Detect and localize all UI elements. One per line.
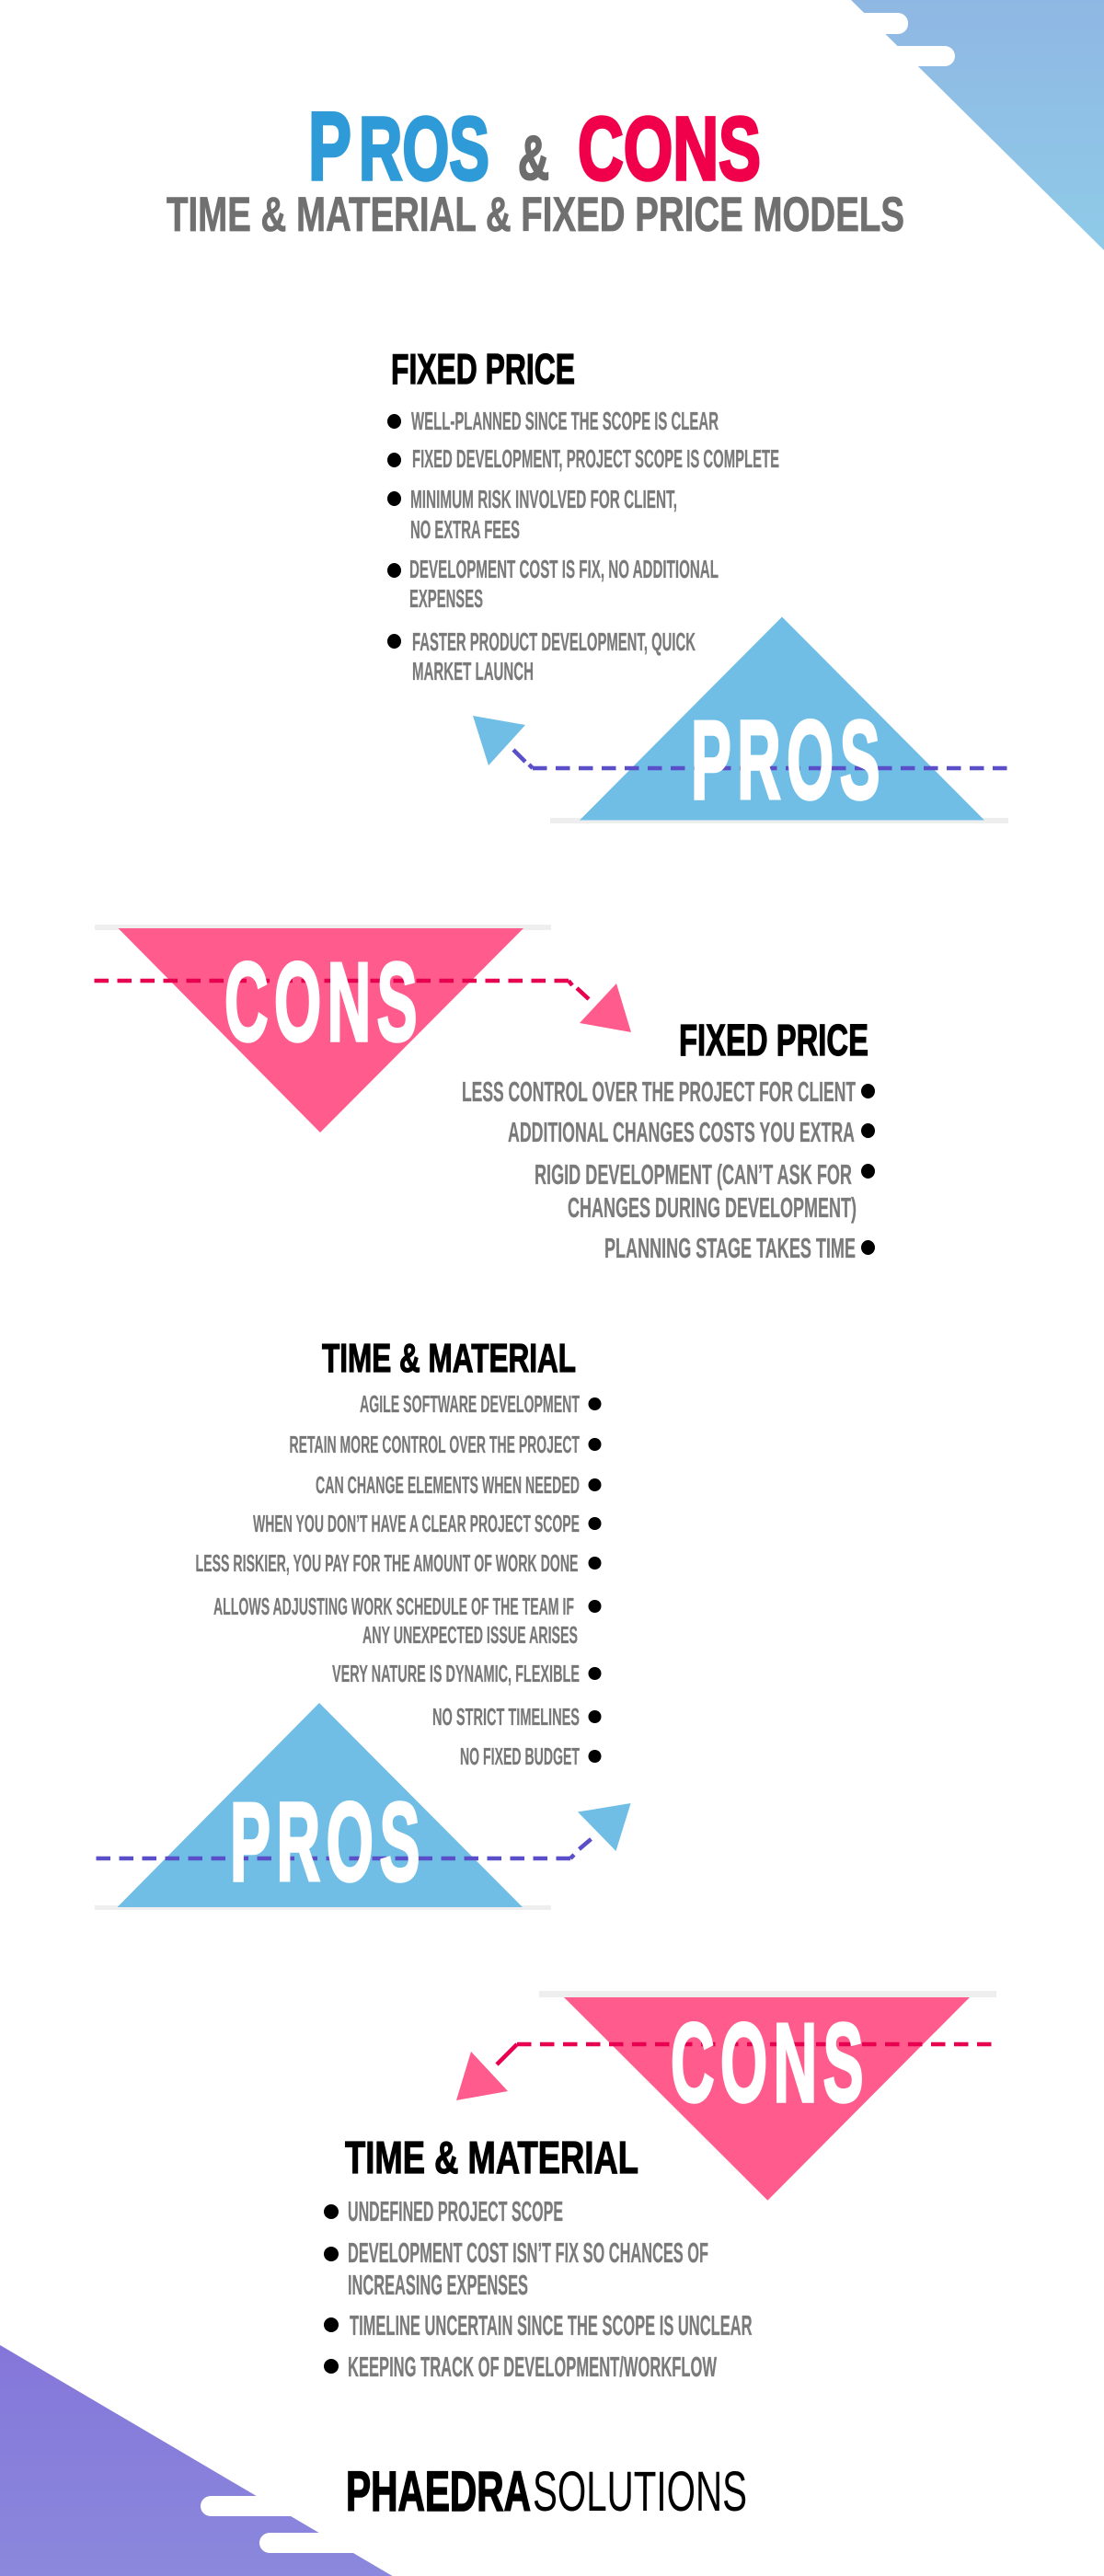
heading: time and material: TIME & MATERIAL bbox=[345, 2133, 638, 2183]
badge label: pros: PROS bbox=[691, 697, 886, 822]
list text: FIXED DEVELOPMENT, PROJECT SCOPE IS COMPLETE bbox=[412, 444, 779, 473]
heading: fixed price: FIXED PRICE bbox=[391, 345, 575, 393]
list text: WELL-PLANNED SINCE THE SCOPE IS CLEAR bbox=[411, 407, 719, 435]
list text bbox=[462, 1075, 857, 1264]
heading: time and material: TIME & MATERIAL bbox=[322, 1337, 576, 1381]
arrow head bbox=[578, 1803, 631, 1851]
list text: DEVELOPMENT COST ISN’T FIX SO CHANCES OF bbox=[348, 2237, 708, 2269]
bullets bbox=[324, 2204, 339, 2374]
list text: CHANGES DURING DEVELOPMENT) bbox=[568, 1191, 857, 1224]
badge: pros triangle with arrow (fixed price) bbox=[473, 616, 1008, 823]
panel: fixed price pros list bbox=[387, 345, 779, 685]
list text: LESS RISKIER, YOU PAY FOR THE AMOUNT OF WORK DONE bbox=[195, 1549, 578, 1577]
bullets bbox=[387, 414, 401, 649]
list text: TIMELINE UNCERTAIN SINCE THE SCOPE IS UNCLEAR bbox=[350, 2309, 753, 2341]
list text: MARKET LAUNCH bbox=[412, 657, 534, 685]
list text: NO STRICT TIMELINES bbox=[432, 1703, 580, 1731]
list text: CAN CHANGE ELEMENTS WHEN NEEDED bbox=[316, 1471, 580, 1499]
decorative corner: bottom left triangle bbox=[0, 2345, 392, 2576]
list text: ANY UNEXPECTED ISSUE ARISES bbox=[362, 1621, 578, 1649]
list text: AGILE SOFTWARE DEVELOPMENT bbox=[360, 1390, 580, 1418]
badge label: cons: CONS bbox=[224, 939, 423, 1064]
arrow head bbox=[456, 2052, 508, 2100]
arrow head bbox=[580, 983, 631, 1032]
heading: fixed price: FIXED PRICE bbox=[679, 1017, 868, 1065]
list text: ADDITIONAL CHANGES COSTS YOU EXTRA bbox=[508, 1116, 855, 1148]
list text: VERY NATURE IS DYNAMIC, FLEXIBLE bbox=[332, 1660, 580, 1687]
title word: cons: CONS bbox=[578, 98, 761, 199]
list text: INCREASING EXPENSES bbox=[348, 2269, 528, 2301]
list text bbox=[348, 2195, 753, 2383]
logo: phaedra solutions bbox=[346, 2460, 747, 2523]
list text: DEVELOPMENT COST IS FIX, NO ADDITIONAL bbox=[409, 555, 719, 583]
badge: cons triangle with arrow (time and material) bbox=[456, 1991, 996, 2201]
list text: EXPENSES bbox=[409, 584, 483, 613]
list text: UNDEFINED PROJECT SCOPE bbox=[348, 2195, 563, 2227]
list text: FASTER PRODUCT DEVELOPMENT, QUICK bbox=[412, 627, 696, 656]
list text: NO FIXED BUDGET bbox=[460, 1742, 580, 1770]
arrow head bbox=[473, 716, 525, 765]
logo: phaedra solutions: PHAEDRA bbox=[346, 2460, 531, 2523]
title ampersand: & bbox=[518, 123, 549, 193]
list text: RIGID DEVELOPMENT (CAN’T ASK FOR bbox=[535, 1158, 852, 1190]
badge label: cons: CONS bbox=[671, 2000, 869, 2125]
title word: pros bbox=[308, 93, 489, 201]
logo: phaedra solutions: SOLUTIONS bbox=[533, 2460, 747, 2523]
bullets bbox=[861, 1084, 875, 1255]
title word: pros: P bbox=[308, 93, 351, 201]
panel: fixed price cons list bbox=[462, 1017, 875, 1264]
list text: KEEPING TRACK OF DEVELOPMENT/WORKFLOW bbox=[348, 2351, 717, 2383]
bullets bbox=[589, 1397, 602, 1763]
badge label: pros: PROS bbox=[230, 1779, 426, 1904]
list text: ALLOWS ADJUSTING WORK SCHEDULE OF THE TEAM IF bbox=[213, 1593, 574, 1620]
list text: PLANNING STAGE TAKES TIME bbox=[604, 1232, 856, 1264]
panel: time and material cons list bbox=[324, 2133, 753, 2383]
title bbox=[167, 93, 904, 242]
list text: WHEN YOU DON’T HAVE A CLEAR PROJECT SCOPE bbox=[253, 1510, 580, 1537]
badge: cons triangle with arrow (fixed price) bbox=[94, 925, 631, 1133]
list text: RETAIN MORE CONTROL OVER THE PROJECT bbox=[289, 1431, 580, 1458]
panel: time and material pros list bbox=[195, 1337, 602, 1770]
list text: NO EXTRA FEES bbox=[410, 515, 520, 544]
list text bbox=[409, 407, 779, 685]
decorative corner: top right triangle bbox=[828, 0, 1104, 250]
list text: MINIMUM RISK INVOLVED FOR CLIENT, bbox=[410, 485, 677, 513]
list text bbox=[195, 1390, 580, 1770]
badge: pros triangle with arrow (time and material) bbox=[94, 1703, 631, 1910]
title word: pros: ROS bbox=[359, 98, 489, 199]
